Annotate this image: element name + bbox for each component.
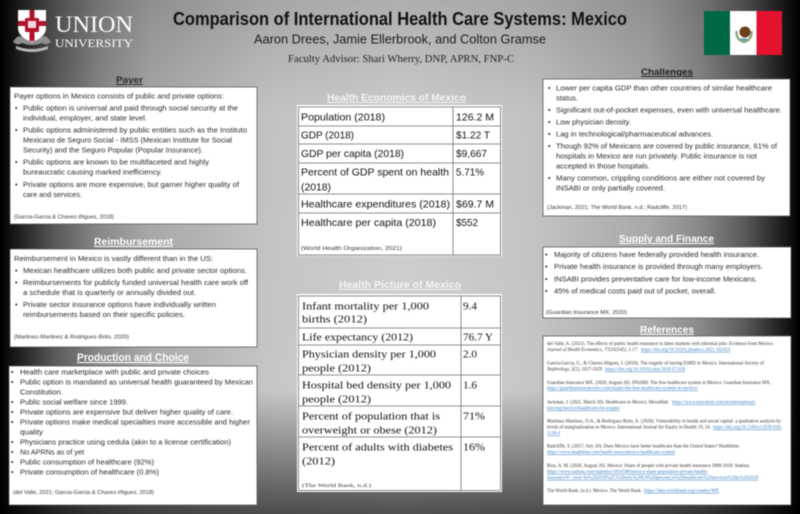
panel: References: levels of marginalization in Mexico. International Journal for Equity in Health 19, 24.: [547, 426, 711, 430]
panel: Challenges: INSABI or only partially covered.: [556, 184, 665, 192]
panel: Production and Choice: Physicians practice using cedula (akin to a license certification): [20, 438, 231, 446]
panel: Supply and Finance: 45% of medical costs paid out of pocket, overall.: [554, 286, 716, 296]
heading: Health Economics of Mexico: Health Economics of Mexico: [327, 93, 466, 104]
table: Health Picture of Mexico: 16%: [463, 442, 485, 454]
table: Health Picture of Mexico: 2.0: [463, 350, 477, 360]
panel: Production and Choice: •: [11, 378, 14, 386]
logo: Union University: [13, 10, 133, 52]
logo: Union University: UNIVERSITY: [55, 36, 133, 50]
panel: Production and Choice: Public social welfare since 1999.: [20, 398, 128, 406]
logo: Union University: UNION: [55, 12, 133, 37]
panel: References: Rios, A. M. (2020, August 26). Mexico: Share of people with private health insurance 2008-2018. Statista.: [547, 464, 750, 469]
panel: Production and Choice: Constitution.: [20, 388, 63, 396]
table: Health Picture of Mexico: people (2012): [302, 364, 371, 374]
panel: Production and Choice: •: [11, 398, 14, 406]
table: Health Economics of Mexico: (World Health Organization, 2021): [301, 246, 402, 252]
panel: Production and Choice: •: [11, 368, 14, 376]
panel: Production and Choice: Public consumption of healthcare (92%): [20, 458, 154, 466]
panel: Production and Choice: •: [11, 408, 14, 416]
panel: Reimbursement: Private sector insurance options have individually written: [23, 300, 216, 309]
panel: Reimbursement: •: [15, 278, 18, 287]
panel: Reimbursement: Mexican healthcare utilizes both public and private sector options.: [23, 266, 247, 275]
panel: Payer: •: [15, 180, 18, 189]
table: Health Economics of Mexico: (2018): [301, 182, 331, 194]
table: Health Economics of Mexico: $69.7 M: [456, 200, 494, 210]
panel: Production and Choice: No APRNs as of yet: [20, 448, 84, 456]
faculty advisor: Faculty Advisor: Shari Wherry, DNP, APRN, FNP-C: [288, 54, 514, 65]
heading: Health Picture of Mexico: Health Picture of Mexico: [339, 280, 461, 291]
table: Health Picture of Mexico: (The World Bank, n.d.): [302, 484, 371, 489]
icon: shield crest: [13, 10, 51, 52]
panel: Challenges: Though 92% of Mexicans are covered by public insurance, 61% of: [556, 142, 777, 150]
panel: References: Jackman, J. (2021, March 30). Healthcare in Mexico. MoveHub.: [547, 400, 669, 406]
panel: Challenges: •: [548, 118, 551, 126]
panel: Challenges: •: [548, 142, 551, 150]
panel: References: https://www.healthline.com/health-news/mexico-healthcare-system: [547, 450, 675, 456]
table: Health Economics of Mexico: Healthcare expenditures (2018): [301, 200, 450, 210]
panel: Payer: Mexicano de Seguro Social - IMSS (Mexican Institute for Social: [23, 136, 232, 144]
panel: Supply and Finance: •: [545, 274, 548, 284]
panel: References: Martinez-Martinez, O.A., & Rodriguez-Brito, A. (2020). Vulnerability in health and social capital: a qualitative analysis by: [547, 420, 781, 424]
table: Health Picture of Mexico: Infant mortality per 1,000: [302, 302, 429, 312]
panel: Challenges: Lower per capita GDP than other countries of similar healthcare: [556, 84, 772, 92]
table: Health Economics of Mexico: $9,667: [456, 149, 487, 160]
panel: References: https://doi.org/10.1186/s12939-020-: [713, 426, 782, 430]
panel: References: Guardian Insurance MX. (2020, August 26). INSABI: The free healthcare system in Mexico. Guardian Insurance MX.: [547, 381, 771, 386]
panel: Supply and Finance: [543, 247, 791, 318]
panel: Supply and Finance: •: [545, 262, 548, 271]
panel: References: Garcia-Garcia, G., & Chavez-Iñiguez, J. (2018). The tragedy of having ESRD in Mexico. International Society of: [547, 362, 764, 366]
panel: Supply and Finance: Private health insurance is provided through many employers.: [554, 262, 763, 271]
table: Health Economics of Mexico: 5.71%: [456, 168, 484, 178]
panel: References: Journal of Health Economics, 77(102545), 1-17.: [547, 348, 638, 353]
panel: Reimbursement: (Martinez-Martinez & Rodriguez-Brito, 2020): [14, 334, 129, 340]
panel: Production and Choice: Health care marketplace with public and private choices: [20, 368, 209, 376]
panel: Challenges: •: [548, 130, 551, 138]
panel: Reimbursement: Reimbursement in Mexico is vastly different than in the US:: [14, 254, 213, 263]
panel: Payer: [10, 87, 257, 224]
panel: Reimbursement: a schedule that is quarterly or annually divided out.: [23, 288, 196, 297]
table: Health Picture of Mexico: people (2012): [302, 394, 371, 406]
panel: Payer: •: [15, 104, 18, 112]
panel: Payer: Security) and the Seguro Popular (Popular Insurance).: [23, 146, 203, 154]
table: Health Picture of Mexico: overweight or obese (2012): [302, 426, 437, 436]
heading: Challenges: Challenges: [641, 67, 693, 78]
heading: Production and Choice: Production and Choice: [77, 352, 189, 364]
panel: Challenges: •: [548, 106, 551, 114]
panel: Supply and Finance: INSABI provides preventative care for low-income Mexicans.: [554, 274, 757, 284]
table: Health Economics of Mexico: Population (2018): [301, 112, 385, 124]
panel: References: Nephrology, 3(5), 1027-1029.: [546, 368, 603, 372]
panel: Reimbursement: [10, 249, 257, 347]
panel: References: https://data.worldbank.org/country/MX: [644, 489, 719, 494]
panel: Challenges: Lag in technological/pharmaceutical advances.: [556, 130, 713, 138]
table: Health Picture of Mexico: Percent of population that is: [302, 412, 440, 422]
panel: References: del Valle, A. (2021). The effects of public health insurance in labor markets with informal jobs: Evidence from Mexico.: [547, 342, 774, 347]
panel: Challenges: status.: [556, 94, 578, 102]
panel: Production and Choice: •: [11, 468, 14, 476]
panel: Production and Choice: Private options are expensive but deliver higher quality of care.: [20, 408, 233, 416]
table: Health Picture of Mexico: births (2012): [302, 314, 367, 326]
panel: Payer: Payer options in Mexico consists of public and private options:: [14, 92, 224, 100]
title: Comparison of International Health Care Systems: Mexico: [173, 8, 627, 29]
panel: Payer: •: [15, 126, 18, 134]
panel: Challenges: accepted in those hospitals.: [556, 162, 650, 170]
panel: Production and Choice: •: [11, 418, 14, 426]
table: Health Economics of Mexico: GDP per capita (2018): [301, 149, 404, 160]
panel: Challenges: (Jackman, 2021; The World Bank, n.d.; Radcliffe, 2017): [547, 205, 687, 211]
panel: References: Radcliffe, S. (2017, July 20). Does Mexico have better healthcare than the United States? Healthline.: [547, 444, 740, 450]
icon: Mexican flag: [704, 11, 782, 55]
heading: References: References: [640, 325, 694, 336]
table: Health Economics of Mexico: $1.22 T: [456, 130, 491, 142]
panel: Payer: Public option is universal and paid through social security at the: [23, 104, 238, 112]
table: Health Picture of Mexico: Physician density per 1,000: [302, 350, 436, 360]
table: Health Picture of Mexico: 9.4: [463, 302, 478, 312]
table: Health Economics of Mexico: $552: [456, 218, 478, 229]
panel: Production and Choice: •: [11, 458, 14, 466]
panel: Challenges: hospitals in Mexico are run privately. Public insurance is not: [556, 152, 757, 160]
table: Health Picture of Mexico: (2012): [302, 456, 335, 468]
panel: References: moving/mexico/healthcare-for-expats/: [547, 406, 621, 412]
panel: Supply and Finance: (Guardian Insurance MX, 2020): [546, 310, 627, 316]
panel: References: https://doi.org/10.1016/j.ekir.2018.07.018: [605, 368, 685, 372]
panel: Reimbursement: Reimbursements for publicly funded universal health care work off: [23, 278, 248, 287]
heading: Supply and Finance: Supply and Finance: [619, 234, 714, 245]
panel: Production and Choice: •: [11, 438, 14, 446]
panel: Payer: •: [15, 158, 18, 166]
panel: Production and Choice: quality: [20, 428, 43, 436]
panel: Payer: Public options are known to be multifaceted and highly: [23, 158, 209, 166]
table: Health Picture of Mexico: 76.7 Y: [463, 332, 494, 344]
panel: Supply and Finance: •: [545, 250, 548, 259]
panel: Payer: (Garcia-Garcia & Chavez-Iñiguez, 2018): [14, 214, 114, 220]
table: Health Economics of Mexico: 126.2 M: [456, 112, 494, 124]
table: Health Picture of Mexico: 71%: [463, 412, 485, 422]
table: Health Picture of Mexico: [297, 294, 502, 492]
table: Health Picture of Mexico: Life expectancy (2012): [302, 332, 413, 344]
panel: Challenges: Significant out-of-pocket expenses, even with universal healthcare.: [556, 106, 782, 114]
table: Health Economics of Mexico: GDP (2018): [301, 130, 354, 142]
heading: Payer: Payer: [116, 75, 143, 86]
panel: References: 1138-4: [547, 432, 560, 436]
panel: Production and Choice: [9, 366, 257, 505]
panel: References: [543, 336, 791, 505]
panel: Reimbursement: •: [15, 266, 18, 275]
panel: Supply and Finance: •: [545, 286, 548, 296]
panel: Production and Choice: Public option is mandated as universal health guaranteed by Mexican: [20, 378, 253, 386]
table: Health Picture of Mexico: 1.6: [463, 380, 477, 392]
panel: Challenges: [543, 79, 790, 216]
panel: References: https://guardianinsurancemx.com/insabi-the-free-healthcare-system-in-mexico/: [547, 386, 699, 392]
panel: Reimbursement: reimbursements based on their specific policies.: [23, 310, 185, 319]
panel: References: https://www.movehub.com/us/international-: [672, 400, 756, 406]
panel: Payer: care and services.: [23, 190, 82, 199]
panel: Production and Choice: Private consumption of healthcare (0.8%): [20, 468, 159, 476]
panel: References: insurance/#:~:text=In%202018%2C%20only%200.8%20percent,to%20healthcare%20services%20in%202018: [547, 476, 758, 481]
table: Health Picture of Mexico: Hospital bed density per 1,000: [302, 380, 451, 392]
panel: References: https://www.statista.com/statistics/1054188/mexico-share-population-private-health-: [547, 470, 708, 475]
panel: References: https://doi.org/10.1016/j.jhealeco.2021.102454: [641, 348, 730, 353]
panel: References: The World Bank. (n.d.). Mexico. The World Bank.: [547, 489, 642, 494]
table: Health Economics of Mexico: Percent of GDP spent on health: [301, 168, 449, 178]
panel: Challenges: Low physician density.: [556, 118, 631, 126]
table: Health Picture of Mexico: Percent of adults with diabetes: [302, 442, 453, 454]
panel: Production and Choice: (del Valle, 2021; Garcia-Garcia & Chavez-Iñiguez, 2018): [13, 490, 154, 496]
table: Health Economics of Mexico: Healthcare per capita (2018): [301, 218, 436, 229]
panel: Production and Choice: •: [11, 448, 14, 456]
authors: Aaron Drees, Jamie Ellerbrook, and Colton Gramse: [254, 32, 546, 46]
panel: Challenges: •: [548, 84, 551, 92]
panel: Payer: bureaucratic causing marked inefficiency.: [23, 168, 162, 176]
heading: Reimbursement: Reimbursement: [94, 237, 174, 248]
panel: Challenges: •: [548, 174, 551, 182]
panel: Payer: individual, employer, and state level.: [23, 114, 147, 122]
panel: Challenges: Many common, crippling conditions are either not covered by: [556, 174, 765, 182]
panel: Reimbursement: •: [15, 300, 18, 309]
table: Health Economics of Mexico: [297, 105, 502, 256]
panel: Production and Choice: Private options make medical specialties more accessible and higher: [20, 418, 251, 426]
panel: Supply and Finance: Majority of citizens have federally provided health insurance.: [554, 250, 759, 259]
panel: Payer: Private options are more expensive, but garner higher quality of: [23, 180, 239, 189]
panel: Payer: Public options administered by public entities such as the Instituto: [23, 126, 247, 134]
